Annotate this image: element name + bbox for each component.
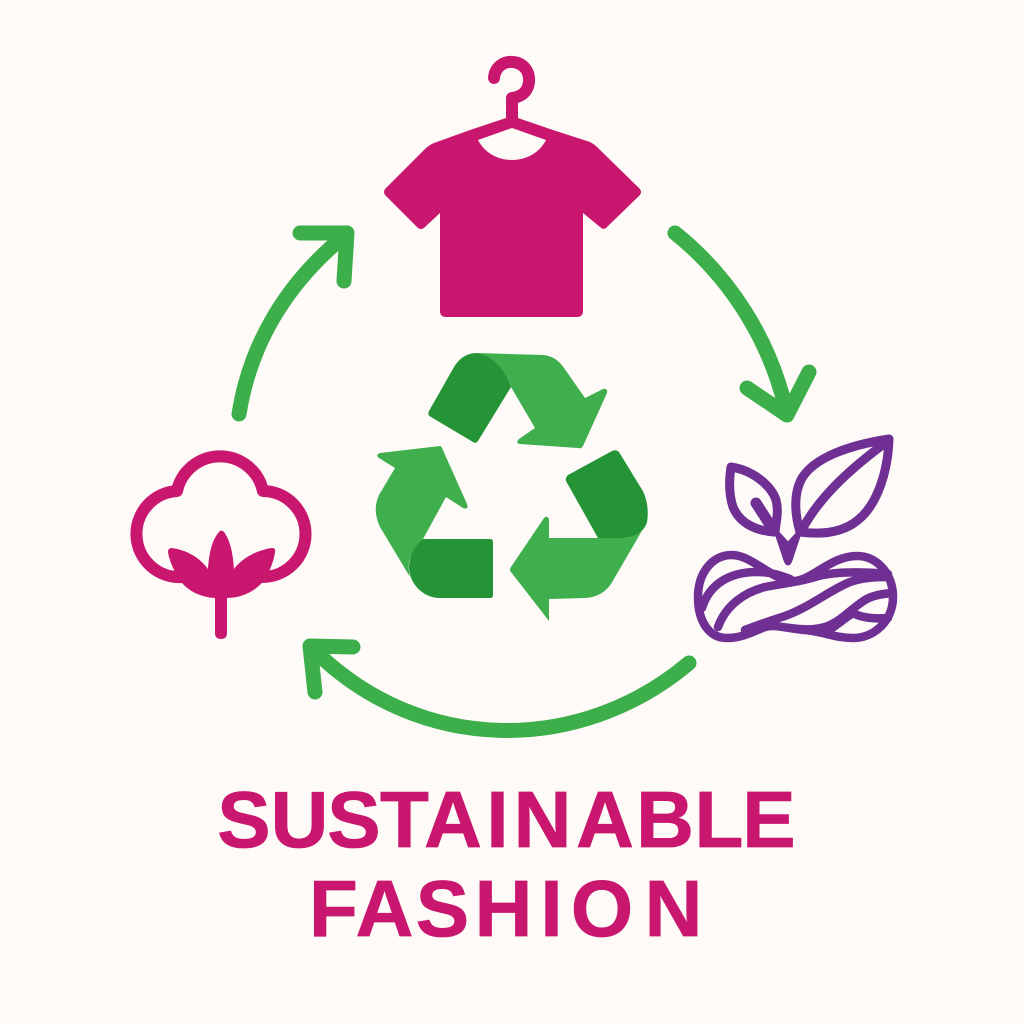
icon: leaves and yarn <box>698 439 893 638</box>
arrow: fibre to cotton <box>310 646 689 730</box>
cotton bud <box>168 530 275 639</box>
sprout stem <box>777 533 799 563</box>
title line 1: SUSTAINABLE <box>217 775 796 864</box>
small leaf <box>730 467 777 532</box>
recycle arrow: right <box>510 450 648 621</box>
arrow: cotton to t-shirt <box>239 233 347 414</box>
icon: recycling symbol <box>376 353 648 621</box>
icon: t-shirt on hanger <box>384 62 641 317</box>
icon: cotton boll <box>136 456 306 639</box>
title line 2: FASHION <box>309 864 702 953</box>
title <box>217 775 796 953</box>
recycle arrow: left <box>376 446 493 598</box>
arrow: t-shirt to fibre <box>675 233 809 415</box>
t-shirt body <box>384 116 641 317</box>
hanger hook <box>494 62 529 118</box>
cotton outline <box>136 456 306 577</box>
large leaf <box>796 439 889 533</box>
yarn bundle <box>698 555 893 638</box>
recycle arrow: top <box>428 353 607 448</box>
